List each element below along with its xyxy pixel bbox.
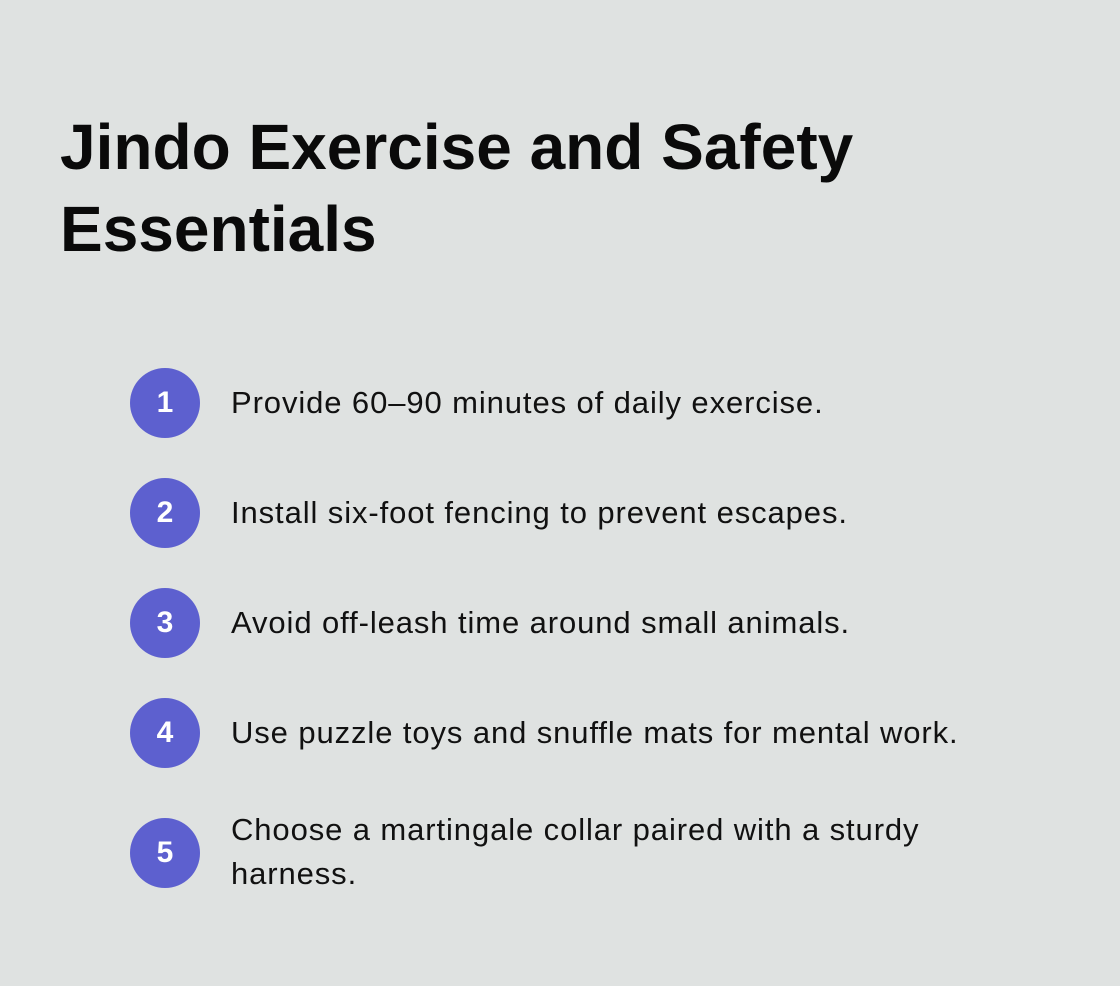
badge 2: 2: [157, 496, 173, 529]
text 5: Choose a martingale collar paired with a sturdy: [231, 812, 919, 847]
badge 3: [130, 588, 200, 658]
badge 1: 1: [157, 386, 173, 419]
title: Jindo Exercise and Safety: [60, 111, 853, 183]
text 2: Install six-foot fencing to prevent escapes.: [231, 495, 848, 530]
badge 2: [130, 478, 200, 548]
text 5: harness.: [231, 856, 357, 891]
badge 4: 4: [157, 716, 173, 749]
badge 3: 3: [157, 606, 173, 639]
badge 5: [130, 818, 200, 888]
text 3: Avoid off-leash time around small animals.: [231, 605, 850, 640]
text 4: Use puzzle toys and snuffle mats for mental work.: [231, 715, 959, 750]
item 1: [130, 368, 824, 438]
item 2: [130, 478, 848, 548]
list of essentials: [130, 368, 959, 891]
badge 4: [130, 698, 200, 768]
text 5: [231, 812, 919, 891]
text 1: Provide 60–90 minutes of daily exercise.: [231, 385, 824, 420]
title: [60, 111, 853, 265]
title: Essentials: [60, 193, 377, 265]
item 4: [130, 698, 959, 768]
badge 1: [130, 368, 200, 438]
badge 5: 5: [157, 836, 173, 869]
item 5: [130, 812, 919, 891]
item 3: [130, 588, 850, 658]
